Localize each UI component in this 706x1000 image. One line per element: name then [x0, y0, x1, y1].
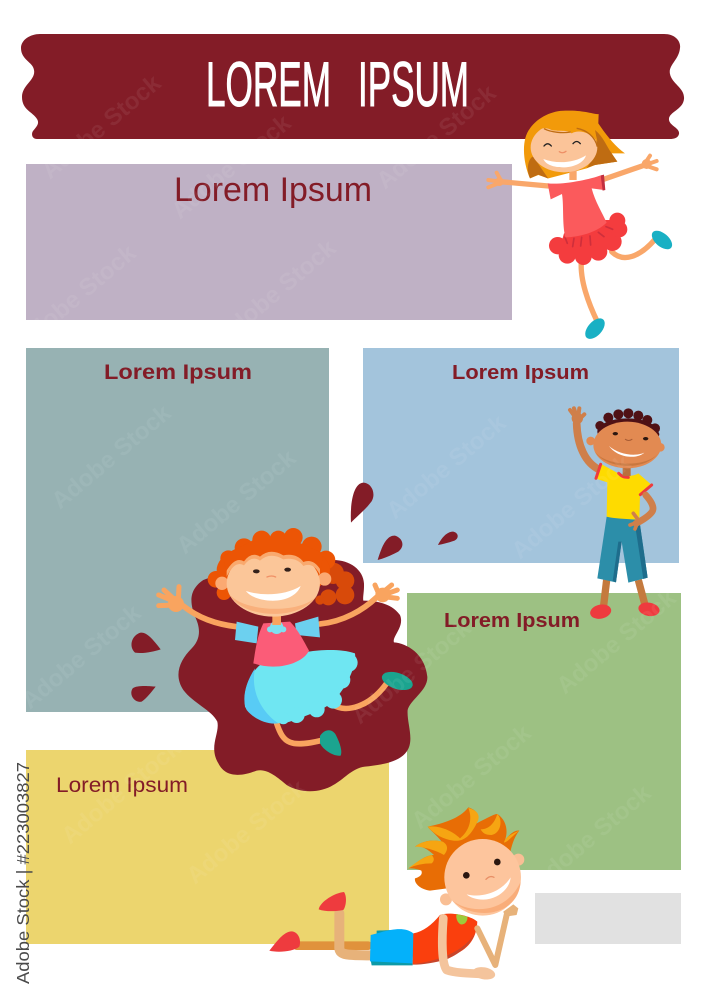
eyes, nose: [253, 569, 260, 573]
skirt pleats: [565, 227, 613, 247]
panel: teal panel: [26, 348, 329, 712]
neck: [272, 613, 281, 625]
shirt trims: [596, 464, 652, 495]
nose: [625, 439, 632, 440]
raised shoe: [319, 892, 346, 911]
watermarks: Adobe Stock: [552, 584, 682, 700]
skirt: [549, 213, 627, 265]
watermarks: Adobe Stock: [212, 234, 342, 350]
arms: [183, 597, 377, 627]
hip hand: [630, 513, 638, 529]
face: [593, 422, 661, 468]
watermarks: Adobe Stock: [407, 719, 537, 835]
smile: [543, 155, 586, 167]
panel: grey box: [535, 893, 681, 944]
ears: [215, 572, 331, 590]
hair: [595, 408, 660, 445]
heading: green panel: Lorem Ipsum: [444, 610, 580, 632]
watermarks: Adobe Stock: [527, 779, 657, 895]
title: IPSUM: [358, 50, 469, 120]
nose: [486, 877, 494, 879]
neck: [623, 463, 631, 476]
face: [531, 122, 597, 172]
ears: [440, 854, 524, 905]
panel: purple top panel: [26, 164, 512, 320]
heading: blue panel: Lorem Ipsum: [452, 362, 589, 384]
watermarks: [12, 69, 682, 895]
arm on hip: [636, 495, 653, 523]
nose: [559, 151, 566, 153]
heading: yellow panel: Lorem Ipsum: [56, 774, 188, 797]
shoes: [582, 315, 608, 342]
arms: [500, 165, 645, 186]
main hair: [208, 528, 335, 600]
front leg and shoe: [277, 723, 323, 744]
panel: green panel: [407, 593, 681, 870]
illustration: waving boy: [570, 408, 665, 621]
back lower leg: [293, 941, 372, 950]
shoes: [589, 603, 613, 621]
smile: [246, 586, 301, 601]
shorts: [371, 930, 413, 965]
lower hand: [472, 965, 496, 981]
face: [227, 550, 320, 617]
hair: [408, 807, 519, 891]
watermarks: Adobe Stock: [167, 109, 297, 225]
eyes: [463, 872, 470, 879]
dress: [548, 175, 607, 237]
splat blob: [178, 560, 427, 791]
bangs: [533, 113, 597, 142]
collar: [456, 914, 467, 924]
collar: [267, 621, 286, 634]
skirt: [245, 650, 358, 724]
watermarks: Adobe Stock: [172, 444, 302, 560]
watermarks: Adobe Stock: [47, 399, 177, 515]
panel: blue panel: [363, 348, 679, 563]
watermarks: Adobe Stock: [372, 79, 502, 195]
eyes: [613, 432, 618, 435]
heading: purple panel: Lorem Ipsum: [174, 171, 372, 209]
watermarks: Adobe Stock: [17, 599, 147, 715]
front arm: [442, 918, 483, 974]
title banner: [21, 34, 684, 139]
illustration: lying boy: [269, 807, 524, 981]
watermarks: Adobe Stock: [382, 409, 512, 525]
watermarks: Adobe Stock: [182, 774, 312, 890]
smile: [609, 446, 644, 457]
watermarks: Adobe Stock: [12, 239, 142, 355]
watermarks: Adobe Stock: [347, 614, 477, 730]
illustration: dancing girl: [488, 111, 675, 342]
legs: [603, 580, 645, 608]
bodice: [253, 622, 309, 667]
hands: [159, 585, 397, 612]
upper hand: [503, 904, 518, 917]
back shoe: [269, 931, 300, 952]
legs: [581, 239, 655, 322]
shorts: [597, 517, 648, 583]
face: [444, 839, 521, 916]
hands: [488, 156, 657, 187]
torso: [413, 914, 477, 964]
sleeves: [235, 617, 320, 643]
neck: [569, 170, 577, 180]
hair highlights: [408, 808, 519, 868]
stock id label: Adobe Stock | #223003827: [13, 762, 33, 984]
heading: teal panel: Lorem Ipsum: [104, 361, 252, 384]
panel: yellow panel: [26, 750, 389, 944]
watermarks: Adobe Stock: [57, 734, 187, 850]
raised arm: [577, 423, 600, 470]
splat drops: [131, 483, 458, 702]
raised leg: [339, 913, 372, 955]
watermarks: Adobe Stock: [507, 449, 637, 565]
shirt: [595, 463, 652, 520]
support arm: [477, 915, 507, 965]
ears: [586, 437, 665, 452]
illustration: girl jumping on splat: [131, 483, 458, 791]
smile: [467, 877, 511, 900]
back hair: [315, 563, 354, 605]
front hair: [227, 543, 320, 577]
watermarks: Adobe Stock: [37, 69, 167, 185]
hair: [524, 111, 625, 178]
eyes: [544, 141, 580, 146]
title: LOREM: [206, 50, 331, 120]
raised hand: [570, 408, 584, 424]
back leg and shoe: [333, 683, 387, 708]
